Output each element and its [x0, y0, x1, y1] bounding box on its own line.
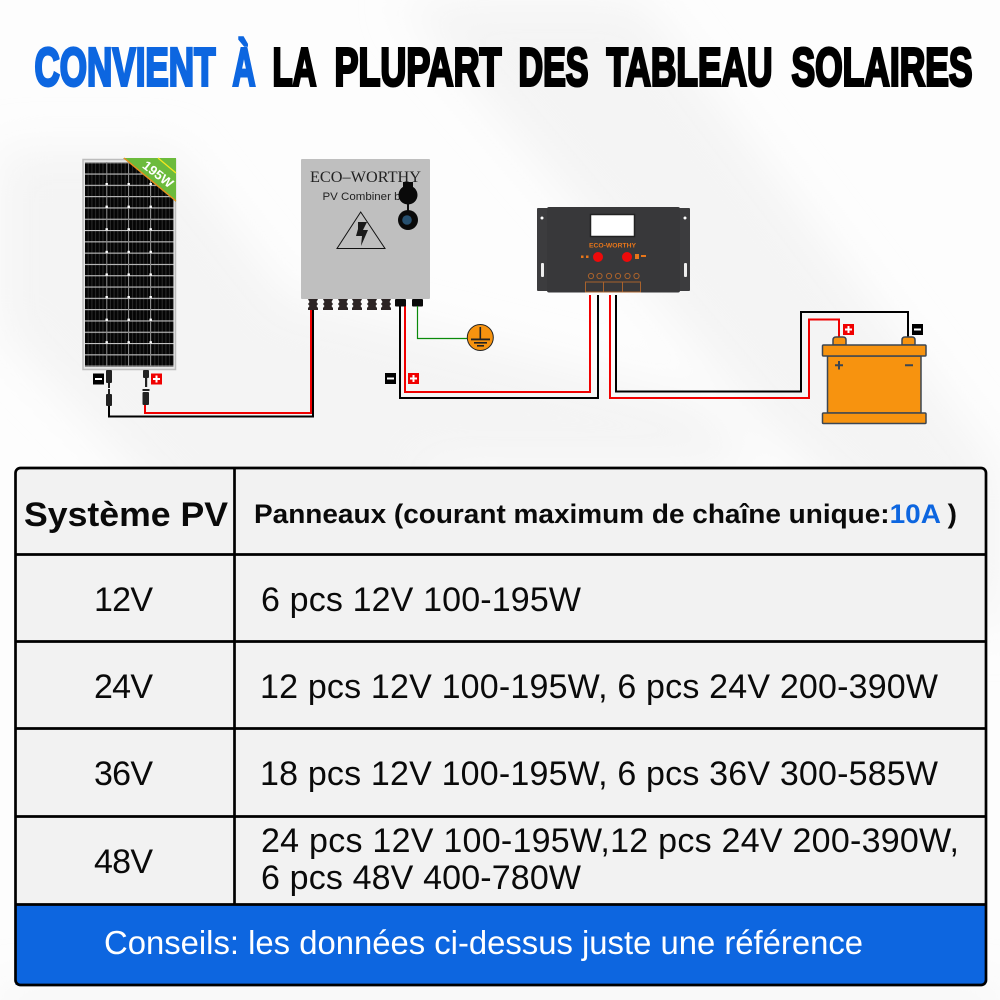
badge: panel minus	[93, 374, 104, 384]
row: 24V: 24V	[94, 668, 153, 706]
row: 12V	[94, 581, 581, 619]
tip text: Conseils: les données ci-dessus juste une référence	[104, 925, 863, 962]
wires: controller to battery	[610, 295, 908, 398]
row: 24V: 12 pcs 12V 100-195W, 6 pcs 24V 200-390W	[260, 668, 938, 706]
header: Système PV: Système PV	[24, 496, 228, 534]
title	[34, 38, 972, 98]
label: 195W ribbon	[123, 158, 177, 202]
wiring diagram	[83, 158, 926, 423]
icon: earth ground	[467, 324, 493, 350]
battery	[822, 337, 926, 424]
row: 48V: 48V	[94, 843, 153, 881]
tip banner background	[16, 905, 986, 985]
spec table	[15, 468, 986, 985]
title: black part: DES	[518, 38, 588, 98]
title: blue part: CONVIENT	[34, 38, 216, 98]
title: blue part: À	[232, 38, 256, 98]
icon: high voltage triangle	[337, 212, 385, 248]
badge: battery plus	[843, 324, 854, 335]
row: 48V: 6 pcs 48V 400-780W	[261, 859, 581, 897]
wires: combiner to controller	[400, 295, 598, 398]
label: 195W ribbon: 195W	[140, 158, 177, 191]
row: 48V: 24 pcs 12V 100-195W,12 pcs 24V 200-390W,	[261, 822, 959, 860]
header: Panneaux: Panneaux (courant maximum de chaîne unique: 10A )	[254, 499, 957, 529]
title: black part: LA	[272, 38, 316, 98]
title: black part: TABLEAU	[606, 38, 772, 98]
wires: panel to combiner	[109, 308, 313, 416]
badge: combiner minus	[385, 373, 396, 384]
ground wire	[418, 306, 468, 338]
row: 36V: 18 pcs 12V 100-195W, 6 pcs 36V 300-585W	[260, 755, 938, 793]
solar panel	[83, 158, 177, 370]
PV combiner box: ECO–WORTHY	[310, 169, 421, 186]
charge controller: ECO-WORTHY	[589, 242, 637, 250]
row: 12V: 12V	[94, 581, 153, 619]
title: black part: PLUPART	[334, 38, 502, 98]
PV combiner box	[301, 159, 430, 310]
row: 36V: 36V	[94, 755, 153, 793]
badge: panel plus	[151, 374, 162, 384]
PV combiner box: PV Combiner b	[322, 191, 400, 203]
row: 48V	[94, 822, 959, 897]
combiner output glands	[395, 299, 423, 306]
controller buttons	[593, 252, 632, 262]
charge controller	[537, 207, 690, 292]
icon: switch knobs	[398, 182, 418, 230]
title: black part	[272, 38, 972, 98]
combiner input connectors	[308, 299, 391, 310]
table outer border	[16, 468, 986, 985]
panel connectors	[106, 370, 150, 406]
row: 12V: 6 pcs 12V 100-195W	[261, 581, 581, 619]
table grid lines	[15, 468, 986, 905]
table background	[16, 468, 986, 985]
badge: battery minus	[912, 324, 923, 335]
badge: combiner plus	[408, 373, 419, 384]
controller screen	[590, 214, 634, 236]
controller terminals	[586, 273, 640, 292]
